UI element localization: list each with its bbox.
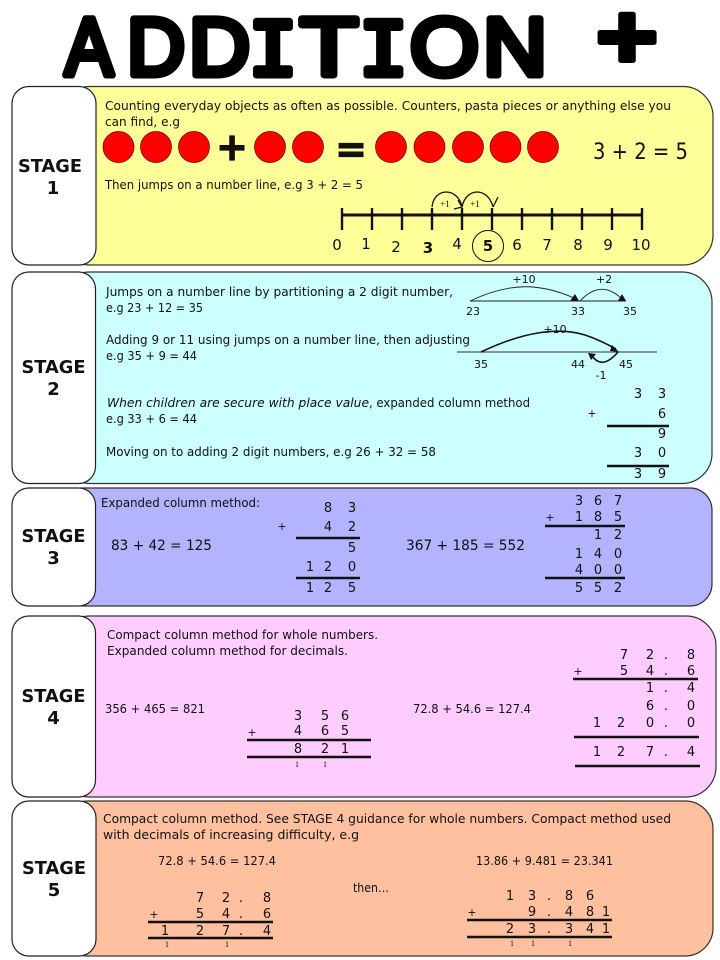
then: then…: [353, 880, 389, 895]
column sum 367 + 185: 400: [575, 563, 622, 578]
stage 2 label: 2: [47, 379, 60, 400]
stage 2 label: [12, 272, 96, 484]
stage 1 intro text: can find, e.g: [105, 114, 180, 129]
column sum 13.86 + 9.481 compact: +: [467, 906, 477, 919]
stage 2 text: e.g 35 + 9 = 44: [106, 348, 197, 363]
number line 0 to 10: 012: [332, 235, 401, 256]
column sum 72.8 + 54.6 compact: 127.4: [161, 924, 271, 939]
number line 35 to 45: 45: [619, 358, 633, 371]
stage 2 text: [105, 284, 530, 459]
column sum 356 + 465: [247, 709, 371, 769]
stage 2 text: When children are secure with place value: [107, 395, 369, 410]
number line 0 to 10: +1: [470, 199, 480, 209]
stage 2 text: , expanded column method: [369, 395, 530, 410]
number line 0 to 10: +1: [440, 199, 450, 209]
column sum 13.86 + 9.481 compact: 23.341: [506, 922, 610, 937]
equation 356 + 465: 356 + 465 = 821: [105, 701, 205, 716]
number line 0 to 10: 4: [452, 235, 462, 253]
number line 35 to 45: -1: [596, 369, 606, 382]
stage 3 heading: Expanded column method:: [101, 495, 260, 510]
panel: stage 4: [12, 616, 716, 797]
number line 35 to 45: +10: [543, 323, 567, 336]
column sum 13.86 + 9.481 compact: 9.481: [528, 905, 610, 920]
column sum 367 + 185: 12: [594, 528, 622, 543]
column sum 367 + 185: [545, 494, 625, 596]
title: D: [189, 2, 250, 93]
stage 2 text: Moving on to adding 2 digit numbers, e.g 26 + 32 = 58: [106, 444, 436, 459]
number line 0 to 10: 10: [631, 236, 651, 254]
column sum 33 + 6: 9: [658, 427, 666, 442]
stage 5 label: [12, 801, 96, 956]
number line caption: Then jumps on a number line, e.g 3 + 2 = 5: [104, 177, 363, 192]
column sum 356 + 465: 821: [294, 742, 349, 757]
stage 3 label: [12, 488, 96, 606]
stage 2 text: e.g 23 + 12 = 35: [106, 300, 203, 315]
column sum 13.86 + 9.481 compact: 111: [510, 939, 572, 948]
column sum 72.8 + 54.6 compact: 54.6: [196, 907, 271, 922]
column sum 356 + 465: 11: [295, 760, 327, 769]
title: N: [483, 2, 547, 93]
number line 23 to 35: [466, 273, 637, 318]
column sum 33 + 6: 39: [634, 467, 666, 482]
stage 4 text: [107, 627, 378, 658]
number line 0 to 10: 6789: [512, 236, 613, 254]
equation 72.8 + 54.6: 72.8 + 54.6 = 127.4: [413, 701, 531, 716]
column sum 367 + 185: +: [545, 511, 555, 524]
number line 23 to 35: 33: [571, 305, 585, 318]
column sum 367 + 185: 185: [575, 510, 622, 525]
column sum 83 + 42: 83: [324, 501, 356, 516]
column sum 356 + 465: 465: [294, 724, 349, 739]
number line 23 to 35: +10: [512, 273, 536, 286]
column sum 72.8 + 54.6 expanded: 127.4: [593, 745, 695, 760]
equation 3 + 2 = 5: 3 + 2 = 5: [593, 140, 688, 165]
counters: 3 + 2 = 5: +: [216, 125, 248, 169]
column sum 72.8 + 54.6 expanded: 120.0: [593, 716, 695, 731]
number line 23 to 35: 35: [623, 305, 637, 318]
panel: stage 3: [12, 488, 712, 606]
stage 4 label: 4: [47, 708, 60, 729]
number line 35 to 45: [457, 323, 657, 382]
title: [65, 0, 658, 100]
stage 2 label: STAGE: [22, 357, 86, 378]
stage 5 text: [103, 811, 671, 842]
column sum 72.8 + 54.6 compact: 72.8: [196, 891, 271, 906]
column sum 356 + 465: 356: [294, 709, 349, 724]
number line 0 to 10: 3: [423, 239, 433, 257]
column sum 33 + 6: [587, 387, 669, 482]
title: O: [410, 2, 479, 93]
stage 1 label: [12, 86, 96, 265]
column sum 13.86 + 9.481 compact: [467, 889, 612, 948]
stage 1 label: 1: [47, 178, 59, 199]
stage 1 intro text: Counting everyday objects as often as possible. Counters, pasta pieces or anything else you: [105, 98, 671, 113]
column sum 72.8 + 54.6 expanded: 72.8: [620, 648, 695, 663]
column sum 83 + 42: 125: [306, 581, 356, 596]
stage 5 text: Compact column method. See STAGE 4 guidance for whole numbers. Compact method used: [103, 811, 671, 826]
equation 367 + 185: 367 + 185 = 552: [406, 538, 525, 554]
column sum 72.8 + 54.6 expanded: 1.4: [646, 681, 695, 696]
column sum 83 + 42: [277, 501, 360, 596]
stage 5 text: with decimals of increasing difficulty, e.g: [103, 827, 359, 842]
stage 1 intro text: [105, 98, 671, 129]
stage 3 label: STAGE: [22, 526, 86, 547]
title: I: [248, 7, 298, 100]
equation 83 + 42: 83 + 42 = 125: [111, 538, 212, 554]
column sum 83 + 42: +: [277, 520, 287, 533]
column sum 72.8 + 54.6 expanded: 6.0: [646, 699, 695, 714]
column sum 356 + 465: +: [247, 726, 257, 739]
stage 4 label: STAGE: [22, 686, 86, 707]
stage 2 text: Adding 9 or 11 using jumps on a number line, then adjusting: [106, 332, 470, 347]
column sum 83 + 42: 120: [306, 560, 356, 575]
stage 5 label: 5: [48, 880, 60, 901]
column sum 72.8 + 54.6 expanded: +: [573, 665, 583, 678]
stage 2 text: Jumps on a number line by partitioning a 2 digit number,: [105, 284, 453, 299]
panel: stage 2: [12, 272, 712, 484]
stage 5 label: STAGE: [22, 858, 86, 879]
panel: stage 5: [12, 801, 713, 956]
title: A: [65, 2, 113, 93]
column sum 33 + 6: +: [587, 407, 597, 420]
column sum 83 + 42: 5: [348, 541, 356, 556]
column sum 33 + 6: 33: [634, 387, 666, 402]
title: T: [300, 2, 358, 93]
column sum 13.86 + 9.481 compact: 13.86: [506, 889, 594, 904]
column sum 367 + 185: 367: [575, 494, 622, 509]
stage 4 text: Compact column method for whole numbers.: [107, 627, 378, 642]
column sum 33 + 6: 6: [658, 407, 666, 422]
number line 35 to 45: 35: [474, 358, 488, 371]
column sum 72.8 + 54.6 expanded: [573, 648, 700, 766]
number line 23 to 35: 23: [466, 305, 480, 318]
stage 4 label: [12, 616, 96, 797]
stage 4 text: Expanded column method for decimals.: [107, 643, 348, 658]
number line 0 to 10: 5: [483, 237, 493, 255]
stage 2 text: e.g 33 + 6 = 44: [106, 411, 197, 426]
equation 72.8 + 54.6: 72.8 + 54.6 = 127.4: [158, 853, 276, 868]
stage 3 label: 3: [47, 548, 60, 569]
column sum 72.8 + 54.6 compact: [148, 891, 273, 949]
title: I: [359, 7, 408, 100]
number line 35 to 45: 44: [571, 358, 585, 371]
counters: 3 + 2 = 5: =: [335, 127, 367, 171]
column sum 83 + 42: 42: [324, 520, 356, 535]
column sum 33 + 6: 30: [634, 446, 666, 461]
panel: stage 1: [12, 86, 713, 265]
column sum 72.8 + 54.6 compact: 11: [165, 940, 229, 949]
equation 13.86 + 9.481: 13.86 + 9.481 = 23.341: [476, 853, 613, 868]
title: D: [127, 2, 185, 93]
counters: 3 + 2 = 5: [103, 125, 558, 171]
column sum 72.8 + 54.6 expanded: 54.6: [620, 664, 695, 679]
number line 23 to 35: +2: [596, 273, 612, 286]
column sum 367 + 185: 552: [575, 581, 622, 596]
column sum 72.8 + 54.6 compact: +: [149, 908, 159, 921]
number line 0 to 10: [332, 192, 651, 262]
column sum 367 + 185: 140: [575, 547, 622, 562]
stage 1 label: STAGE: [18, 156, 82, 177]
